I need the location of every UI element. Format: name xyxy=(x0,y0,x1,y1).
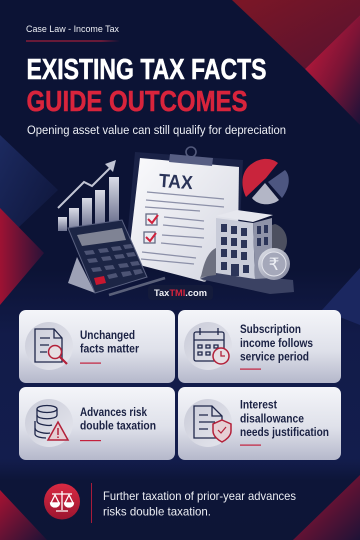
title xyxy=(26,54,266,118)
icon: coins with warning xyxy=(35,406,68,440)
rupee coin: ₹ xyxy=(269,255,279,275)
title: GUIDE OUTCOMES xyxy=(26,86,248,118)
card: unchanged facts xyxy=(19,310,175,383)
pie chart xyxy=(242,159,289,204)
callout text: risks double taxation. xyxy=(103,506,211,518)
subtitle: Opening asset value can still qualify for depreciation xyxy=(27,123,286,137)
card: interest disallowance xyxy=(178,387,341,460)
icon: document with shield xyxy=(194,406,231,442)
building xyxy=(200,210,294,294)
clipboard xyxy=(125,147,243,282)
card text: income follows xyxy=(240,336,313,350)
card text: Subscription xyxy=(240,322,301,336)
callout text xyxy=(103,490,296,518)
card text: facts matter xyxy=(80,342,139,356)
checklist boxes xyxy=(144,214,158,243)
eyebrow label: Case Law - Income Tax xyxy=(26,23,119,34)
rupee coin xyxy=(258,248,290,280)
card text: needs justification xyxy=(240,425,329,439)
callout text: Further taxation of prior-year advances xyxy=(103,490,296,503)
icon: document with magnifier xyxy=(35,329,67,364)
bar chart with arrow xyxy=(58,160,119,232)
card text xyxy=(240,322,313,364)
card: advances risk xyxy=(19,387,175,460)
card text xyxy=(240,398,329,439)
logo badge xyxy=(148,285,213,300)
card text: Unchanged xyxy=(80,328,135,342)
card text: service period xyxy=(240,350,309,364)
card text xyxy=(80,405,156,432)
calculator xyxy=(68,220,147,293)
card: subscription income xyxy=(178,310,341,383)
logo badge: TaxTMI.com xyxy=(154,288,207,299)
clipboard heading: TAX xyxy=(158,171,194,194)
divider xyxy=(91,483,92,523)
pen xyxy=(109,278,165,295)
card text: disallowance xyxy=(240,412,304,426)
card text: Advances risk xyxy=(80,405,147,419)
illustration xyxy=(58,147,294,300)
icon: calendar with clock xyxy=(194,328,229,364)
title: EXISTING TAX FACTS xyxy=(26,54,266,86)
icon: scales of justice xyxy=(44,484,80,520)
footer callout xyxy=(44,483,296,523)
card text: Interest xyxy=(240,398,277,412)
card text xyxy=(80,328,139,356)
card text: double taxation xyxy=(80,418,156,432)
eyebrow rule xyxy=(26,40,120,42)
